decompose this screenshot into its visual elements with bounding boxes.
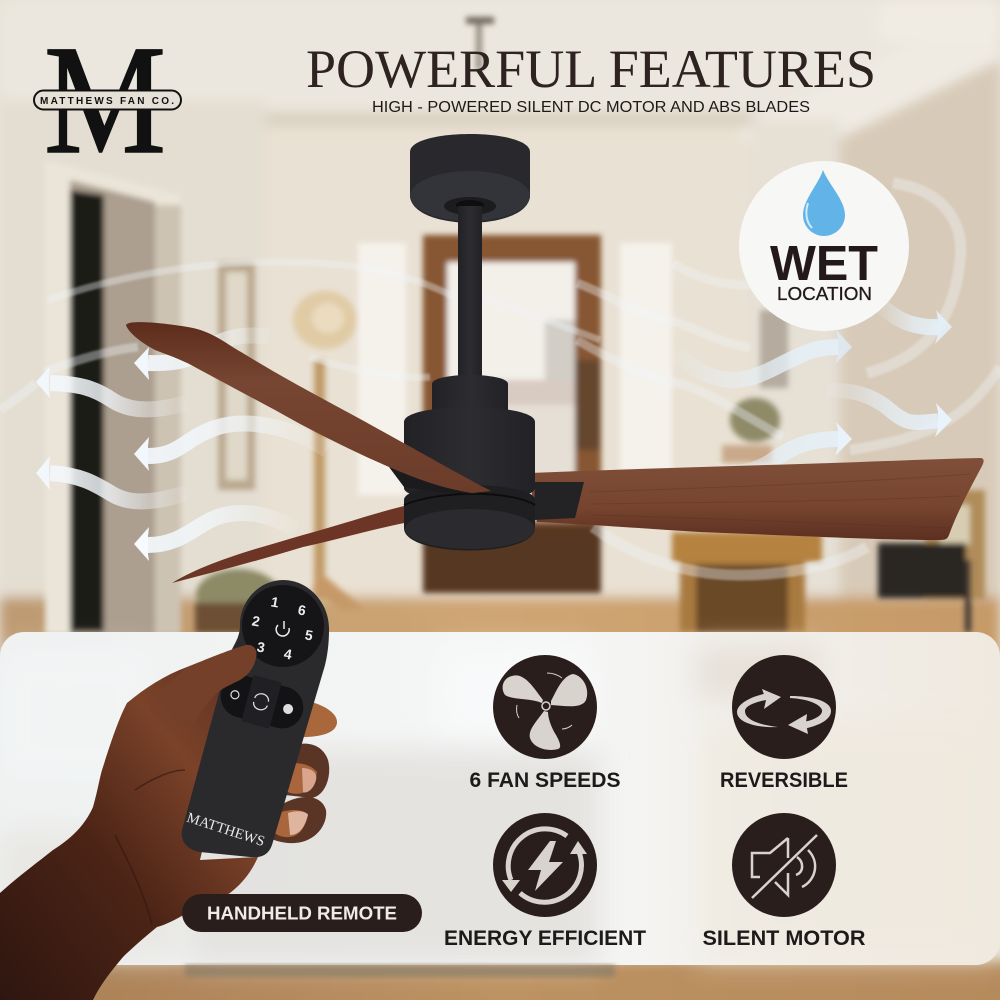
- label: 6 FAN SPEEDS: [470, 769, 620, 792]
- buttons: 6: [297, 601, 307, 619]
- picture frame: [218, 262, 255, 490]
- left doorway: [45, 160, 180, 635]
- hat stand: [314, 360, 325, 600]
- icon: muted speaker: [732, 813, 836, 917]
- console table: [672, 532, 822, 562]
- hand back fingers: [265, 700, 337, 843]
- air arrow right 3: [827, 390, 952, 437]
- badge text: WET: WET: [770, 237, 878, 291]
- ceiling fan: [126, 134, 984, 583]
- ceiling light: [476, 20, 482, 70]
- badge text: LOCATION: LOCATION: [777, 284, 872, 304]
- picture right: [760, 310, 788, 388]
- bracket right: [534, 482, 584, 520]
- downrod: [458, 206, 482, 384]
- wooden door: [423, 235, 601, 593]
- air arrow left 1: [36, 366, 186, 409]
- buttons: 5: [304, 626, 314, 644]
- bracket left: [389, 467, 478, 494]
- fan blade: upper left: [126, 322, 491, 493]
- icon: power: [276, 621, 289, 636]
- motor housing: [389, 375, 535, 550]
- icon: fan: [493, 655, 597, 759]
- buttons: [251, 593, 314, 663]
- plant left: [196, 569, 280, 621]
- air arrow left 3: [36, 456, 186, 501]
- button row: [215, 668, 309, 736]
- chair: [925, 490, 985, 600]
- airflow swirls: [0, 183, 1000, 575]
- handheld remote label: HANDHELD REMOTE: [207, 902, 397, 924]
- buttons: 1: [270, 593, 280, 611]
- forearm and palm: [0, 667, 258, 1000]
- buttons: 2: [251, 612, 261, 630]
- title: POWERFUL FEATURES: [306, 39, 876, 99]
- wrist creases: [115, 770, 185, 925]
- logo: M: [44, 13, 166, 186]
- feature: silent motor: [702, 813, 866, 950]
- feature: energy efficient: [444, 813, 646, 950]
- air arrow right 1: [880, 305, 952, 344]
- canopy: [410, 134, 530, 223]
- label: ENERGY EFFICIENT: [444, 927, 646, 950]
- icon: lightning cycle: [493, 813, 597, 917]
- air arrow left 2: [134, 335, 269, 380]
- remote logo: MATTHEWS: [185, 810, 267, 850]
- air arrow left 4: [134, 424, 327, 471]
- feature: 6 fan speeds: [470, 655, 620, 792]
- subtitle: HIGH - POWERED SILENT DC MOTOR AND ABS BLADES: [372, 99, 810, 116]
- panel: features: [0, 632, 1000, 977]
- air arrow right 2: [677, 330, 852, 380]
- wet location badge: [739, 161, 909, 331]
- air arrow left 5: [134, 513, 296, 561]
- fan blade: right: [528, 458, 984, 540]
- buttons: 3: [256, 638, 266, 656]
- feature: reversible: [720, 655, 848, 792]
- icon: water drop: [803, 170, 845, 236]
- icon: rotation arrows: [732, 655, 836, 759]
- logo: MATTHEWS FAN CO.: [40, 96, 174, 107]
- plant right: [730, 398, 780, 442]
- side windows: [358, 243, 406, 495]
- label: REVERSIBLE: [720, 769, 848, 792]
- handheld remote label: [182, 894, 422, 932]
- fan blade: lower left: [172, 506, 404, 583]
- air arrow right 4: [713, 422, 852, 473]
- buttons: 4: [283, 645, 293, 663]
- thumb: [150, 645, 257, 733]
- hand holding remote: [0, 580, 337, 1000]
- remote: [182, 580, 329, 857]
- label: SILENT MOTOR: [702, 927, 866, 950]
